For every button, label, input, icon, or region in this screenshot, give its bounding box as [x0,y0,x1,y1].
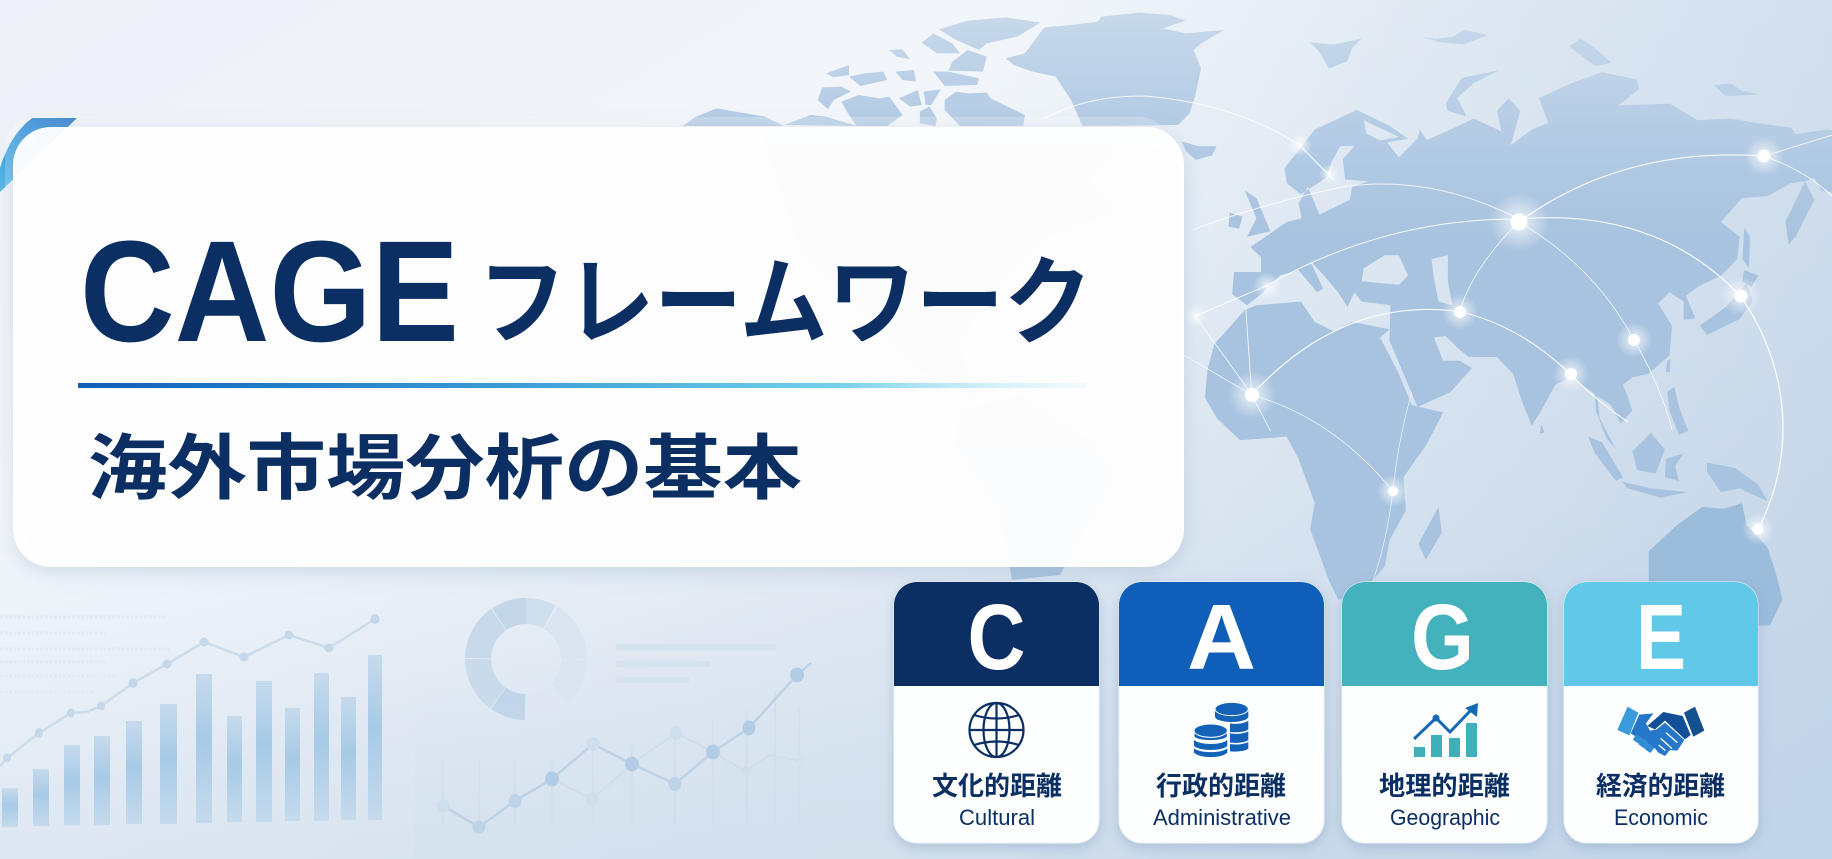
card C header [894,582,1099,686]
icon: growth chart [1414,703,1478,757]
world map [683,13,1832,629]
card E: economic distance [1564,582,1758,843]
letter A: A [1187,585,1256,689]
network nodes [1183,133,1784,545]
letter G: G [1411,585,1474,689]
card A: administrative distance [1119,582,1324,843]
label: Economic: Economic [1614,805,1708,830]
legend bars [616,644,776,683]
label: economic distance: 経済的距離 [1596,771,1725,801]
letter C: C [968,585,1026,689]
title: framework: フレームワーク [478,250,1092,357]
donut chart [458,591,594,727]
label: geographic distance: 地理的距離 [1379,771,1510,801]
label: administrative distance: 行政的距離 [1156,771,1286,801]
title panel [13,127,1184,567]
card C: cultural distance [894,582,1099,843]
icon: coins [1194,702,1248,757]
title: CAGE: CAGE [80,211,459,372]
card E header [1564,582,1758,686]
card A header [1119,582,1324,686]
Eurasia [1232,72,1832,450]
islands around Eurasia [1182,30,1814,629]
line chart (right background) [436,663,811,834]
divider [78,383,1086,388]
faint list rows [0,617,170,692]
bar chart (background) [2,655,382,827]
north polar islands and Greenland [683,13,1224,126]
route network lines [1044,96,1832,580]
letter E: E [1636,585,1686,689]
card G: geographic distance [1342,582,1547,843]
lower background shade [415,700,1015,859]
label: Administrative: Administrative [1153,805,1291,830]
subtitle: 海外市場分析の基本 [88,430,802,509]
line chart over bars [0,614,380,766]
label: Cultural: Cultural [959,805,1035,830]
corner accent ribbon [0,118,77,192]
icon: globe [970,703,1024,757]
label: cultural distance: 文化的距離 [932,771,1062,801]
Africa [1205,302,1443,599]
label: Geographic: Geographic [1390,805,1500,830]
card G header [1342,582,1547,686]
background data visuals [0,591,1015,859]
back frame behind panel [5,117,1170,557]
North and South America (behind panel) [760,128,1130,580]
icon: handshake [1617,707,1704,756]
